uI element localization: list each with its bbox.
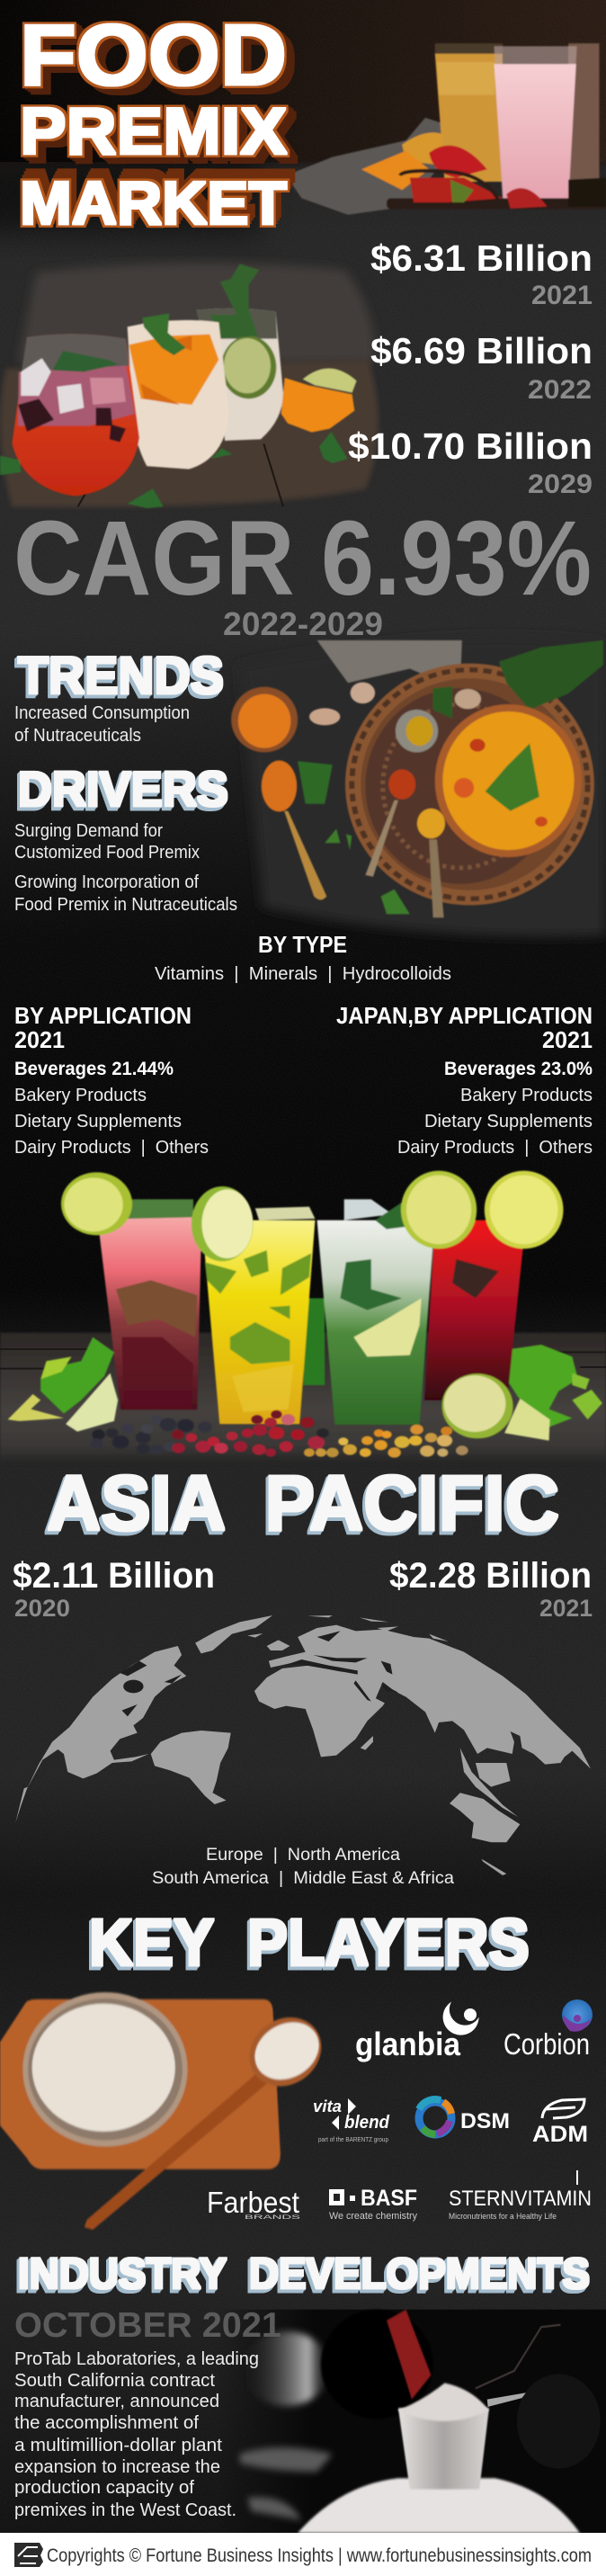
drivers: DRIVERS: [18, 761, 228, 817]
drivers: Food Premix in Nutraceuticals: [14, 895, 237, 915]
development text: a multimillion-dollar plant: [14, 2436, 222, 2455]
logo: vitablend: part of the BARENTZ group: [318, 2137, 388, 2143]
logo: Farbest: BRANDS: [245, 2215, 300, 2221]
by application: 2021: [14, 1026, 65, 1053]
drivers: Growing Incorporation of: [14, 872, 199, 892]
by application: BY APPLICATION: [14, 1002, 192, 1029]
logo: Corbion: Corbion: [504, 2027, 590, 2061]
logo: glanbia: [355, 1994, 484, 2062]
trends: TRENDS: [18, 647, 224, 705]
world map: [15, 1615, 591, 1875]
trends: of Nutraceuticals: [14, 726, 141, 746]
logo: vitablend: vita: [313, 2097, 342, 2115]
market size figures: [348, 237, 593, 499]
logo: Corbion: [504, 1999, 593, 2061]
other regions: Europe | North America: [206, 1846, 400, 1865]
CAGR: 2022-2029: [223, 605, 383, 642]
heading: Key Players: KEY PLAYERS: [89, 1905, 530, 1980]
by type: [155, 931, 451, 984]
market size figures: $10.70 Billion: [348, 425, 593, 467]
logo: ADM: [532, 2099, 588, 2147]
by application: Dietary Supplements: [14, 1112, 182, 1131]
photo: spiced dal on copper plate: [231, 637, 606, 936]
heading: Asia Pacific: ASIA PACIFIC: [47, 1460, 559, 1547]
title: [20, 7, 287, 237]
drivers: Customized Food Premix: [14, 843, 200, 863]
other regions: South America | Middle East & Africa: [152, 1869, 454, 1888]
Japan by application: 2021: [542, 1026, 593, 1053]
logos: [207, 1994, 593, 2222]
heading: Industry Developments: INDUSTRY DEVELOPMENTS: [18, 2250, 590, 2298]
regional values: $2.11 Billion: [13, 1556, 215, 1596]
development text: the accomplishment of: [14, 2413, 199, 2433]
logo: Farbest: Farbest: [207, 2186, 299, 2219]
logo: ADM: ADM: [532, 2122, 588, 2147]
development text: [14, 2306, 281, 2520]
regional values: [13, 1556, 593, 1622]
logo: BASF: BASF: [361, 2186, 417, 2211]
development text: South California contract: [14, 2371, 215, 2391]
title: FOOD: [20, 7, 287, 103]
title: PREMIX: [20, 95, 287, 168]
market size figures: $6.31 Billion: [370, 237, 593, 279]
drivers: Surging Demand for: [14, 821, 163, 841]
Japan by application: Dairy Products | Others: [397, 1138, 593, 1158]
market size figures: 2029: [528, 470, 593, 499]
logo: BASF: [329, 2186, 417, 2222]
trends: [14, 647, 224, 746]
footer: [0, 2533, 606, 2576]
trends: Increased Consumption: [14, 703, 190, 723]
logo: glanbia: glanbia: [355, 2026, 461, 2062]
logo: DSM: DSM: [460, 2109, 510, 2133]
Japan by application: Bakery Products: [460, 1086, 593, 1105]
logo: BASF: We create chemistry: [329, 2211, 417, 2222]
market size figures: $6.69 Billion: [370, 330, 593, 371]
development text: expansion to increase the: [14, 2457, 220, 2477]
regional values: 2021: [539, 1595, 593, 1622]
logo: SternVitamin: STERNVITAMIN: [449, 2187, 592, 2211]
by application: [14, 1002, 209, 1158]
logo: vitablend: [313, 2097, 390, 2143]
development text: ProTab Laboratories, a leading: [14, 2349, 259, 2369]
logo: DSM: [419, 2099, 510, 2134]
market size figures: 2022: [528, 375, 592, 405]
photo: powder bowl on cutting board: [0, 1992, 330, 2230]
photo: cocktails on wooden table: [0, 263, 379, 508]
regional values: $2.28 Billion: [389, 1556, 592, 1596]
development text: manufacturer, announced: [14, 2392, 219, 2411]
by type: BY TYPE: [258, 931, 347, 958]
regional values: 2020: [14, 1595, 70, 1622]
Japan by application: Beverages 23.0%: [444, 1059, 593, 1079]
by type: Vitamins | Minerals | Hydrocolloids: [155, 964, 451, 984]
market size figures: 2021: [531, 281, 593, 310]
photo: four mocktail glasses: [0, 1171, 606, 1464]
other regions: [152, 1846, 454, 1888]
photo: smoothies on tray: [286, 43, 606, 215]
development text: OCTOBER 2021: [14, 2306, 281, 2345]
development text: production capacity of: [14, 2478, 194, 2498]
icon: Fortune Business Insights logo: [14, 2543, 43, 2567]
Japan by application: [336, 1002, 593, 1158]
title: MARKET: [20, 169, 287, 237]
development text: premixes in the West Coast.: [14, 2500, 236, 2520]
Japan by application: Dietary Supplements: [424, 1112, 593, 1131]
by application: Bakery Products: [14, 1086, 147, 1105]
by application: Dairy Products | Others: [14, 1138, 209, 1158]
drivers: [14, 761, 237, 915]
logo: SternVitamin: [449, 2170, 592, 2221]
by application: Beverages 21.44%: [14, 1059, 174, 1079]
logo: vitablend: blend: [344, 2113, 390, 2133]
logo: SternVitamin: Micronutrients for a Healthy Life: [449, 2212, 557, 2221]
berries: [90, 1410, 468, 1458]
photo: powder scoop with bottle: [217, 2310, 606, 2533]
